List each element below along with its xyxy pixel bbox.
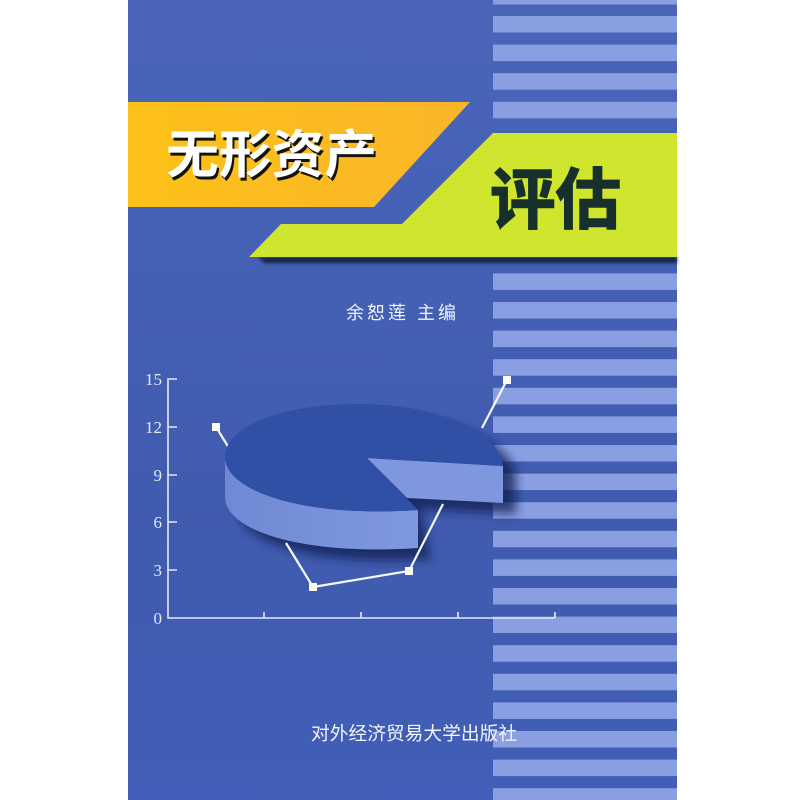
right side stripes — [493, 0, 677, 800]
axes — [168, 379, 555, 618]
author line: 余恕莲 主编 — [346, 303, 456, 323]
green banner shadow — [258, 257, 677, 263]
axis labels: 0 — [154, 609, 162, 628]
axis labels: 12 — [145, 418, 162, 437]
publisher: 对外经济贸易大学出版社 — [311, 723, 517, 744]
axis labels — [145, 370, 162, 628]
axis labels: 15 — [145, 370, 162, 389]
pie top — [225, 404, 503, 511]
pie shadow — [238, 415, 516, 560]
line series — [216, 380, 507, 448]
cover background — [128, 0, 677, 800]
axis labels: 3 — [154, 561, 162, 580]
title: intangible assets: 无形资产 — [168, 130, 379, 188]
lower line segments — [286, 504, 443, 587]
3D pie — [225, 404, 503, 549]
pie cut face — [367, 458, 503, 503]
orange title banner — [128, 102, 470, 207]
axis labels: 6 — [154, 513, 162, 532]
data markers — [212, 376, 511, 591]
chart — [145, 370, 555, 628]
pie outer side — [225, 457, 418, 549]
title: intangible assets: 无形资产 — [166, 127, 377, 185]
title: evaluation: 评估 — [490, 163, 621, 237]
axis labels: 9 — [154, 466, 162, 485]
green title banner — [249, 133, 677, 257]
